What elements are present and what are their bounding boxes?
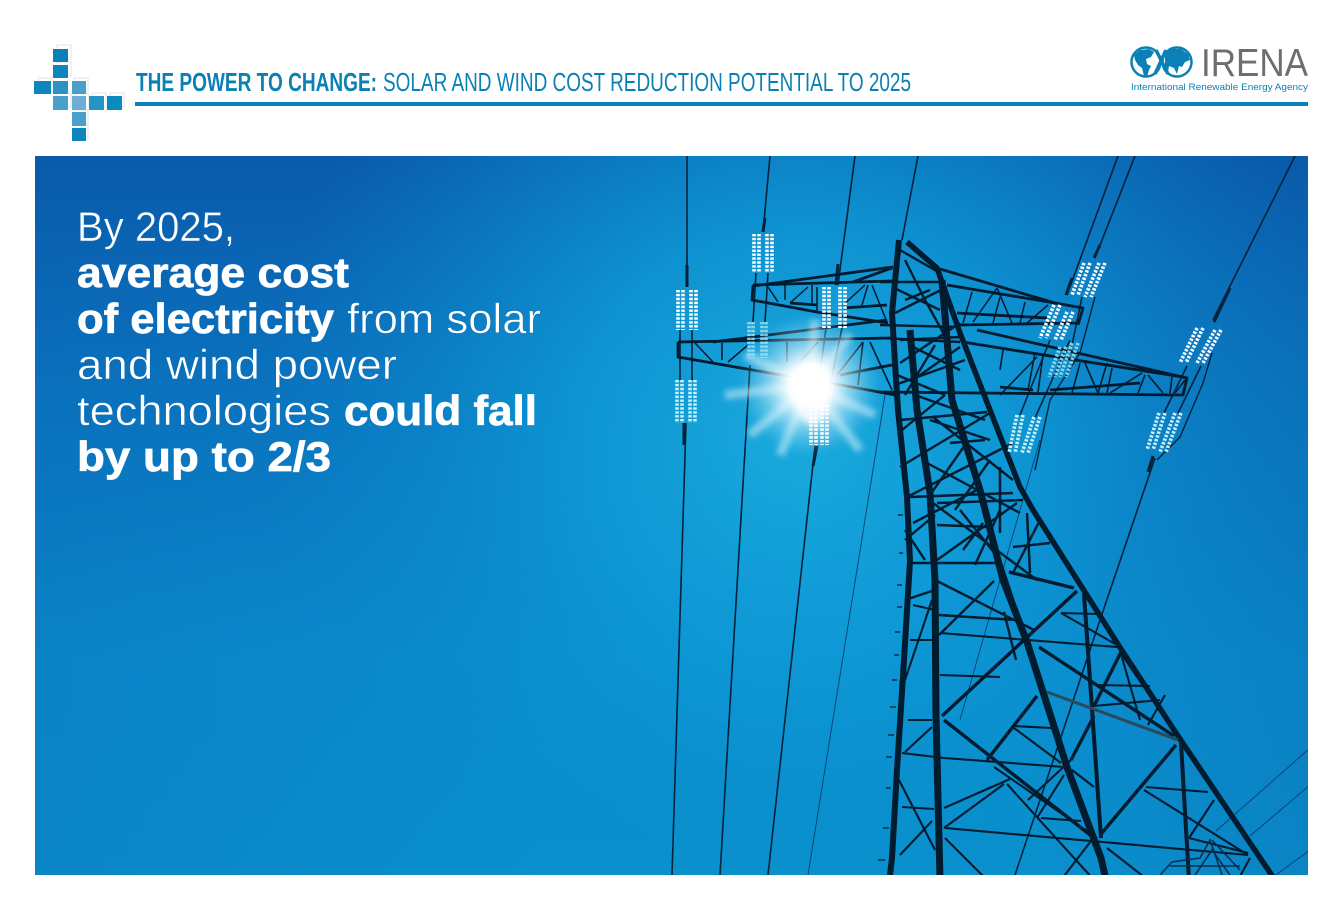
tower: lower bracing <box>878 515 1250 880</box>
icon: globe infinity <box>1132 48 1192 77</box>
panel: photo of transmission tower against blue sky <box>35 156 1310 880</box>
distant tower <box>1160 840 1240 875</box>
headline text <box>77 203 541 480</box>
insulators <box>677 234 1221 453</box>
headline text: from solar <box>347 295 541 342</box>
tower: upper lattice <box>880 250 1050 660</box>
logo: IRENA: International Renewable Energy Agency <box>1131 82 1308 93</box>
headline text: of electricity <box>77 295 335 342</box>
title: THE POWER TO CHANGE: <box>136 67 377 97</box>
logo: IRENA: IRENA <box>1201 42 1308 85</box>
tower: cross arms <box>678 267 1187 395</box>
lower right arm <box>880 330 1187 395</box>
headline text: By 2025, <box>77 203 235 250</box>
power lines <box>672 156 1310 875</box>
headline text: by up to 2/3 <box>77 433 331 480</box>
upper right arm <box>940 269 1083 325</box>
headline text: technologies <box>77 387 331 434</box>
lower left arm <box>678 320 895 395</box>
title: SOLAR AND WIND COST REDUCTION POTENTIAL TO 2025 <box>383 67 911 97</box>
insulators: faint <box>749 322 1078 377</box>
insulators: shaded <box>677 380 1181 453</box>
headline text: could fall <box>344 387 537 434</box>
tower: main legs <box>890 240 1275 880</box>
insulators: bright <box>678 234 1221 445</box>
headline text: and wind power <box>77 341 397 388</box>
logo: cross of squares <box>34 45 124 141</box>
upper left arm <box>752 267 893 323</box>
logo: IRENA <box>1131 42 1308 93</box>
sky background <box>35 156 1308 875</box>
headline text: average cost <box>77 249 349 296</box>
title <box>136 67 911 97</box>
sun glare <box>725 315 880 455</box>
header rule <box>135 102 1308 106</box>
